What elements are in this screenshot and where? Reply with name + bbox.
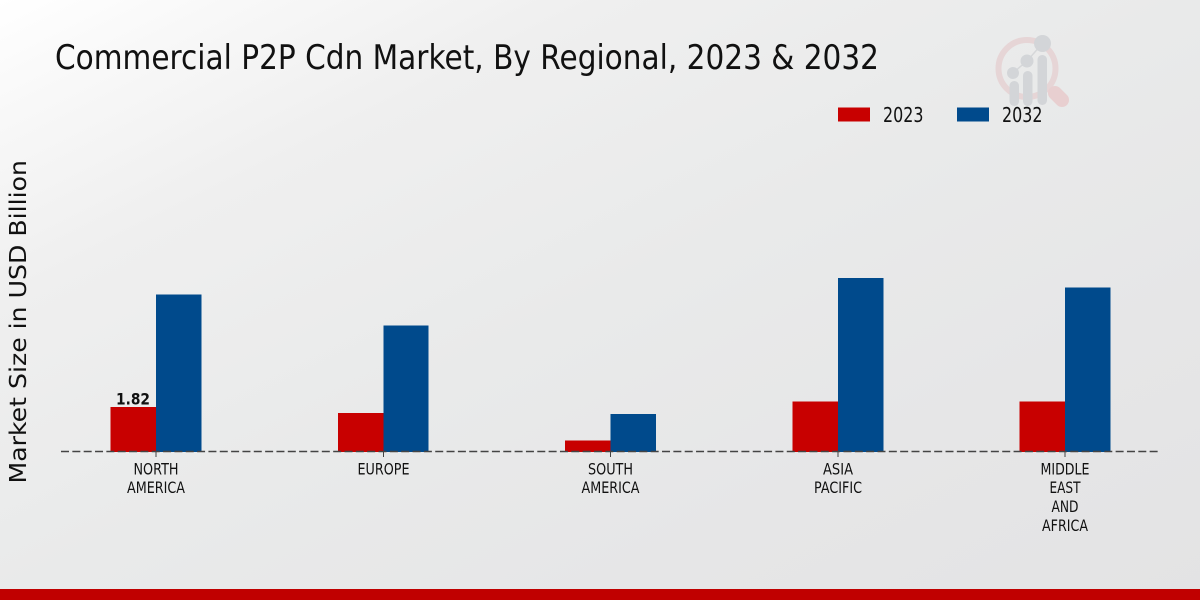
bottom red band <box>0 589 1200 600</box>
x label: Asia Pacific: ASIA <box>823 460 853 478</box>
bar chart <box>61 278 1159 535</box>
x label: Middle East and Africa: MIDDLE <box>1040 460 1090 478</box>
legend item: 2032 <box>957 103 1042 127</box>
bars: North America <box>110 294 202 452</box>
x label: North America: NORTH <box>134 460 178 478</box>
icon: watermark logo <box>998 35 1062 106</box>
bars: South America <box>565 414 656 452</box>
title: Commercial P2P Cdn Market, By Regional, 2023 & 2032 <box>55 38 879 78</box>
legend item: 2023: 2023 <box>883 103 924 127</box>
x label: Europe: EUROPE <box>358 460 410 478</box>
x label: Middle East and Africa: EAST <box>1050 478 1081 497</box>
x label: South America: AMERICA <box>582 478 640 497</box>
legend <box>838 103 1042 127</box>
legend item: 2032: 2032 <box>1002 103 1042 127</box>
bars: Asia Pacific <box>792 278 884 452</box>
y axis label: Market Size in USD Billion <box>4 160 32 484</box>
x label: Middle East and Africa: AND <box>1052 497 1078 516</box>
bars: Europe <box>338 326 428 452</box>
x label: Asia Pacific: PACIFIC <box>814 478 862 497</box>
data label: 1.82: 1.82 <box>116 390 150 408</box>
x label: Middle East and Africa: AFRICA <box>1042 516 1088 535</box>
axis baseline <box>61 450 1159 452</box>
legend item: 2023 <box>838 103 924 127</box>
x label: North America: AMERICA <box>127 478 185 497</box>
x label: South America: SOUTH <box>588 460 633 478</box>
bars: Middle East and Africa <box>1020 288 1110 452</box>
